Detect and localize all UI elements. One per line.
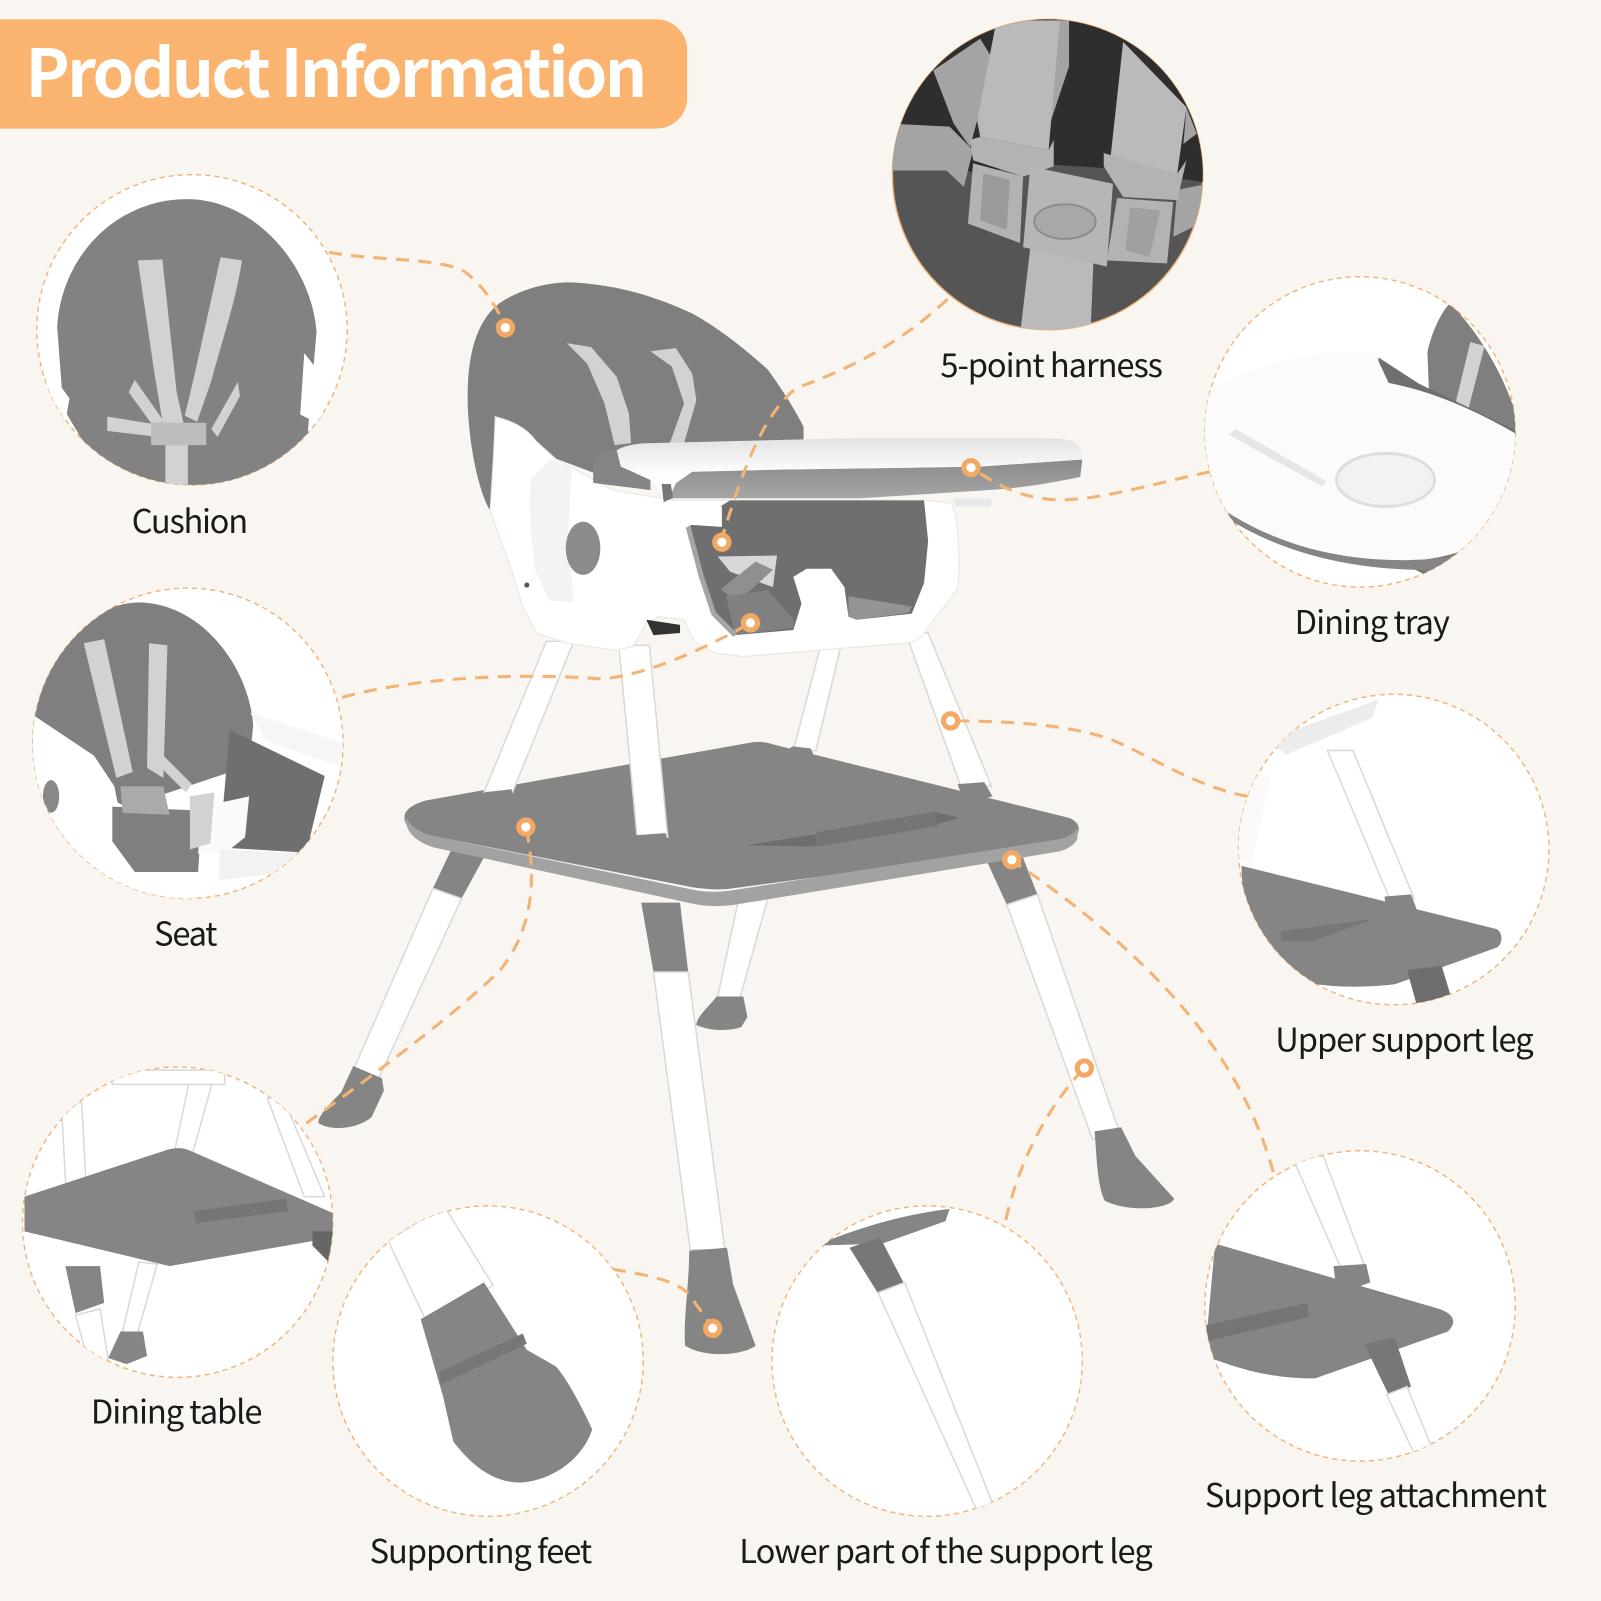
round adjuster [566, 522, 600, 575]
panel: cushion detail [37, 175, 347, 496]
connector: attachment [1011, 860, 1273, 1172]
label: lower part of the support leg: Lower part of the support leg [739, 1526, 1153, 1573]
panel: 5-point harness detail [892, 18, 1204, 330]
backrest [468, 282, 804, 511]
white body frame [490, 417, 959, 657]
panel: supporting feet detail [333, 1206, 643, 1516]
marker dots [498, 321, 1091, 1336]
label: supporting feet: Supporting feet [370, 1526, 592, 1573]
panel: dining tray detail [1201, 277, 1521, 587]
label: dining table: Dining table [91, 1386, 262, 1433]
connector: tray [971, 468, 1210, 500]
straps [567, 343, 631, 445]
lower legs and feet [433, 845, 486, 899]
high chair illustration [318, 282, 1174, 1354]
tray bracket [955, 498, 991, 506]
connector: lower leg [1006, 1068, 1084, 1220]
connector: cushion [329, 252, 505, 327]
seat cavity [688, 500, 928, 635]
title banner: Product Information [26, 21, 647, 117]
tray [593, 450, 650, 490]
connector: upper leg [951, 721, 1248, 796]
connector: harness [721, 299, 948, 541]
panel: seat detail [31, 588, 344, 899]
tabletop [404, 742, 1079, 889]
label: dining tray: Dining tray [1295, 597, 1450, 644]
connector: feet [613, 1269, 713, 1327]
label: support leg attachment: Support leg attachment [1205, 1470, 1547, 1517]
label: seat: Seat [154, 908, 217, 955]
connector: table [306, 827, 531, 1123]
seat legs and sockets [793, 648, 840, 750]
label: upper support leg: Upper support leg [1275, 1015, 1534, 1062]
label: 5-point harness: 5-point harness [940, 340, 1163, 387]
connector: seat [342, 623, 750, 697]
panel: upper support leg detail [1239, 694, 1549, 1007]
panel: lower part of support leg detail [772, 1206, 1082, 1516]
panel: support leg attachment detail [1205, 1151, 1515, 1461]
label: cushion: Cushion [132, 496, 248, 543]
panel: dining table detail [22, 1067, 333, 1377]
